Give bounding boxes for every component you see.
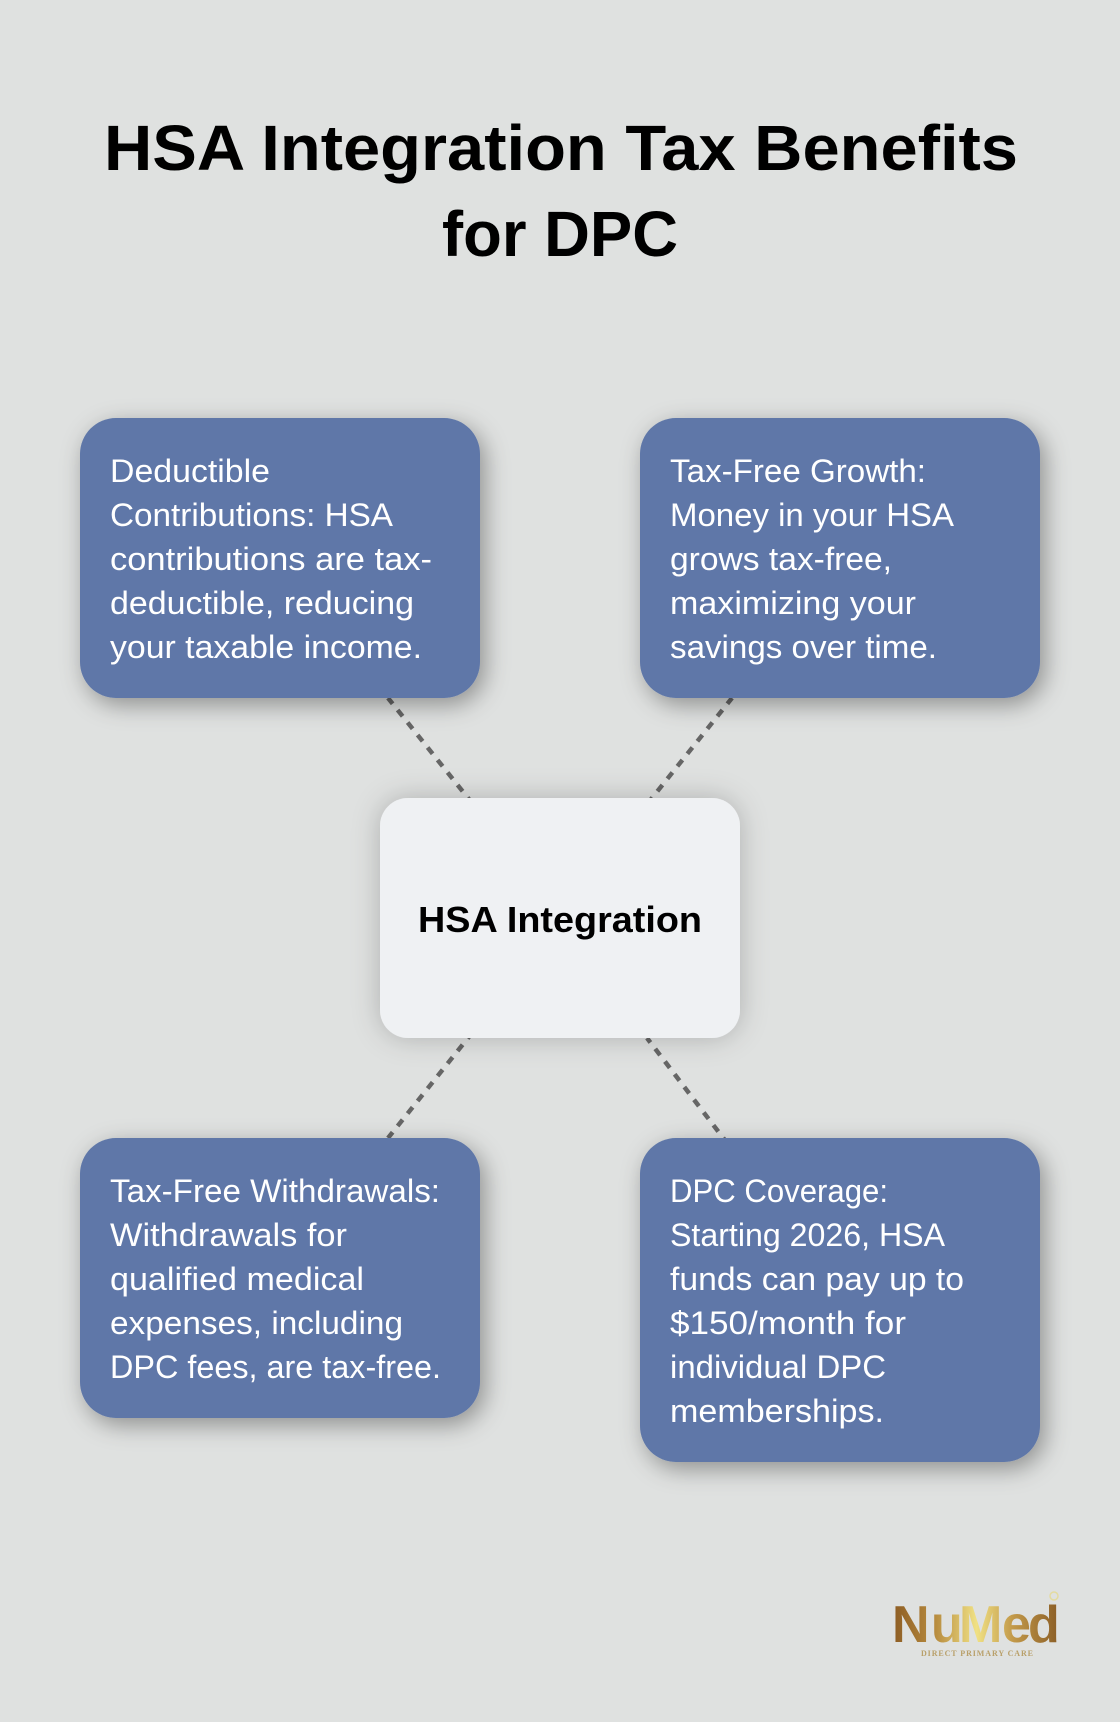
panel: deductible contributions: your taxable income. (110, 629, 422, 665)
panel: tax-free withdrawals: expenses, including (110, 1305, 403, 1341)
panel: tax-free withdrawals: DPC fees, are tax-free. (110, 1349, 441, 1385)
panel: DPC coverage: Starting 2026, HSA (670, 1217, 946, 1253)
panel: tax-free growth: Money in your HSA (670, 497, 955, 533)
panel: DPC coverage: memberships. (670, 1393, 884, 1429)
title (104, 112, 1018, 270)
title: for DPC (442, 198, 678, 270)
panel: tax-free withdrawals (80, 1138, 480, 1418)
panel: DPC coverage: funds can pay up to (670, 1261, 964, 1297)
dashed connectors (388, 698, 732, 1143)
logo: NuMed: NuMed (892, 1596, 1060, 1654)
panel: deductible contributions: Contributions: HSA (110, 497, 394, 533)
logo: NuMed: DIRECT PRIMARY CARE (921, 1649, 1033, 1658)
panel: center hub (380, 798, 740, 1038)
panel: deductible contributions (80, 418, 480, 698)
panel: tax-free growth (640, 418, 1040, 698)
panel: tax-free withdrawals: Withdrawals for (110, 1217, 347, 1253)
panel: tax-free withdrawals: Tax-Free Withdrawals: (110, 1173, 440, 1209)
panel: tax-free growth: grows tax-free, (670, 541, 892, 577)
title: HSA Integration Tax Benefits (104, 112, 1018, 184)
panel: deductible contributions: contributions are tax- (110, 541, 432, 577)
panel: tax-free growth: Tax-Free Growth: (670, 453, 926, 489)
panel: DPC coverage (640, 1138, 1040, 1462)
panel: DPC coverage: DPC Coverage: (670, 1173, 888, 1209)
panel: deductible contributions: deductible, reducing (110, 585, 414, 621)
panel: tax-free growth: maximizing your (670, 585, 916, 621)
panel: DPC coverage: $150/month for (670, 1305, 906, 1341)
panel: tax-free withdrawals: qualified medical (110, 1261, 364, 1297)
panel: tax-free growth: savings over time. (670, 629, 937, 665)
panel: deductible contributions: Deductible (110, 453, 270, 489)
panel: DPC coverage: individual DPC (670, 1349, 886, 1385)
panel: center hub: HSA Integration (418, 899, 702, 940)
